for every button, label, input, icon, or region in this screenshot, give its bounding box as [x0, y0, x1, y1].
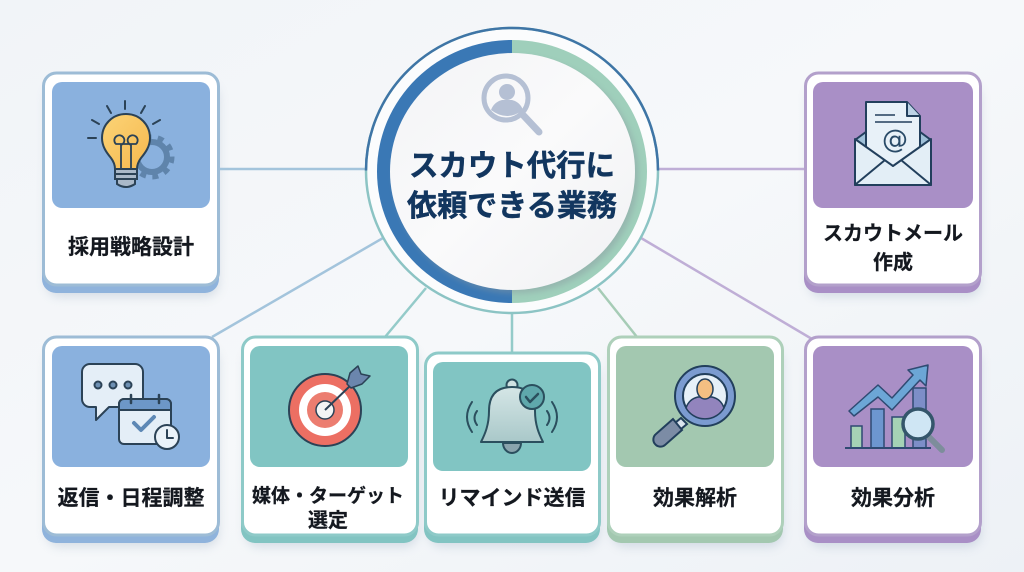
label: 効果解析 — [653, 487, 737, 510]
title: スカウト代行に — [409, 150, 615, 183]
icon: light bulb and gear — [88, 101, 172, 187]
connector lines — [212, 169, 812, 352]
icon: bar chart with arrow and magnifier — [845, 365, 942, 450]
thick two-colour ring — [377, 40, 647, 303]
card: 効果解析 — [607, 337, 783, 543]
label — [252, 485, 404, 532]
icon: bell with check — [467, 380, 557, 453]
icon: magnifier with person — [484, 76, 539, 132]
card: スカウトメール作成 — [804, 73, 981, 293]
title: 依頼できる業務 — [407, 190, 617, 223]
label — [823, 222, 963, 274]
label: リマインド送信 — [438, 487, 586, 510]
icon: envelope with document: @ — [882, 125, 908, 155]
icon: magnifier with person — [653, 366, 735, 447]
label: 媒体・ターゲット — [252, 485, 404, 507]
card: 採用戦略設計 — [42, 73, 219, 293]
icon: target with arrow — [289, 366, 370, 446]
title — [407, 150, 617, 223]
central hub — [366, 28, 658, 313]
label: 返信・日程調整 — [58, 487, 204, 510]
card soft shadows — [46, 84, 981, 547]
outer thin ring — [366, 28, 658, 313]
card: リマインド送信 — [424, 353, 600, 543]
label: 選定 — [308, 509, 348, 532]
label: 採用戦略設計 — [68, 236, 194, 259]
card: 媒体・ターゲット選定 — [241, 337, 418, 543]
label: 効果分析 — [851, 487, 935, 510]
card: 返信・日程調整 — [42, 337, 219, 543]
label: 作成 — [873, 250, 913, 274]
label: スカウトメール — [823, 222, 963, 245]
icon: envelope with document — [855, 102, 931, 185]
icon: chat bubble and calendar — [82, 364, 179, 449]
card: 効果分析 — [804, 337, 981, 543]
